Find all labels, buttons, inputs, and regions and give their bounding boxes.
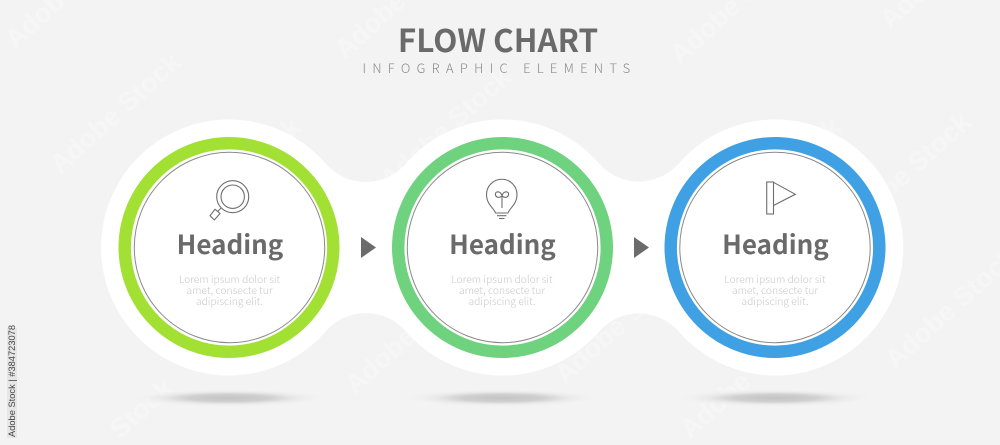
blue ring (671, 143, 879, 352)
heading: step 1: Heading (177, 225, 284, 262)
heading: step 2: Heading (449, 225, 556, 262)
watermark pattern: Adobe Stock (44, 46, 187, 179)
panel: step 3 (671, 143, 879, 352)
thin inner ring (407, 152, 598, 343)
shadow: step 3 (675, 389, 875, 407)
watermark pattern: Adobe Stock (374, 61, 517, 194)
watermark pattern: Adobe (674, 366, 756, 444)
watermark pattern: Adobe Stock (549, 256, 692, 389)
watermark pattern: Stock (104, 372, 179, 444)
watermark pattern: Adobe Stock (339, 266, 482, 399)
text block: step 3: Lorem ipsum dolor sit (724, 271, 826, 286)
subtitle: INFOGRAPHIC ELEMENTS (362, 58, 637, 77)
shadow: step 1 (129, 389, 329, 407)
text block: step 2: amet, consecte tur (459, 282, 545, 297)
shadow: step 2 (402, 389, 602, 407)
icon: flag (767, 182, 795, 214)
icon: light bulb with sprout (486, 179, 517, 218)
watermark pattern: Adobe Stock (704, 111, 847, 244)
arrow: step 2 to step 3 (634, 237, 649, 258)
watermark pattern: Adobe Stock (164, 111, 307, 244)
white connected backdrop (101, 119, 903, 376)
text block: step 3: amet, consecte tur (732, 282, 818, 297)
stock id label: Adobe Stock | #384723078 (7, 325, 17, 437)
panel: step 2 (398, 143, 607, 352)
thin inner ring (680, 152, 870, 343)
panel: step 1 (125, 143, 333, 352)
text block: step 1: amet, consecte tur (186, 282, 273, 297)
thin inner ring (134, 152, 325, 343)
icon: magnifying glass (210, 181, 249, 220)
green ring (398, 143, 607, 352)
heading: step 3: Heading (722, 225, 829, 262)
arrow: step 1 to step 2 (361, 237, 376, 258)
title: FLOW CHART (398, 17, 598, 62)
text block: step 1: Lorem ipsum dolor sit (179, 271, 281, 286)
text block: step 2: Lorem ipsum dolor sit (451, 271, 553, 286)
text block: step 2: adipiscing elit. (468, 293, 536, 308)
text block: step 3: adipiscing elit. (741, 293, 809, 308)
lime ring (125, 143, 333, 352)
watermark pattern: Adobe Stock (834, 106, 977, 239)
text block: step 1: adipiscing elit. (196, 293, 263, 308)
